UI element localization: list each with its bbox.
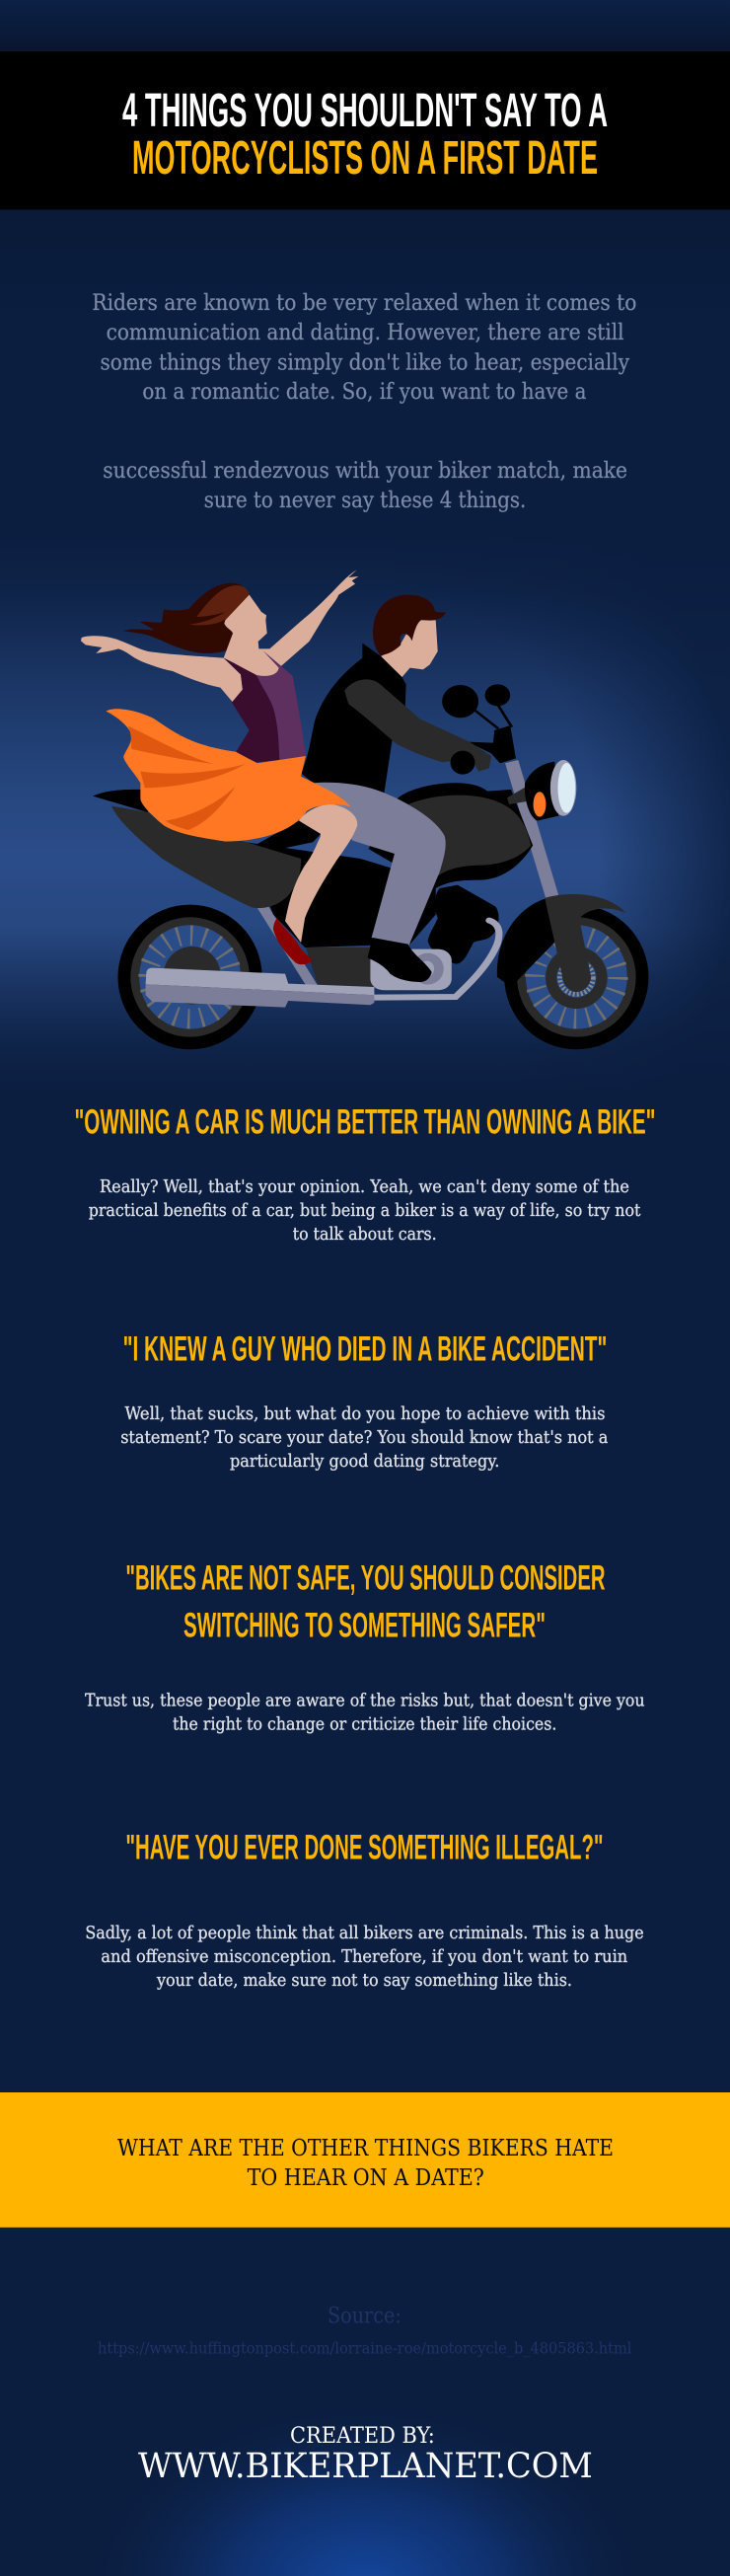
quote 1 text (89, 1176, 641, 1245)
quote 2 text: Well, that sucks, but what do you hope to achieve with this (124, 1403, 606, 1424)
woman passenger (81, 569, 358, 964)
intro text: sure to never say these 4 things. (204, 489, 526, 513)
call to action banner: TO HEAR ON A DATE? (248, 2165, 484, 2191)
quote 4 text: Sadly, a lot of people think that all bikers are criminals. This is a huge (85, 1923, 644, 1943)
source: https://www.huffingtonpost.com/lorraine-roe/motorcycle_b_4805863.html (98, 2338, 631, 2357)
intro text: successful rendezvous with your biker match, make (103, 459, 627, 484)
quote 3 text: the right to change or criticize their life choices. (173, 1713, 556, 1734)
call to action banner (0, 2092, 730, 2228)
quote 4 text: and offensive misconception. Therefore, if you don't want to ruin (101, 1946, 628, 1967)
quote 3 text: Trust us, these people are aware of the risks but, that doesn't give you (85, 1690, 645, 1710)
source (98, 2305, 631, 2357)
intro text: Riders are known to be very relaxed when it comes to (92, 291, 636, 316)
quote 1 text: to talk about cars. (293, 1224, 437, 1245)
quote 1 text: Really? Well, that's your opinion. Yeah, we can't deny some of the (100, 1176, 629, 1197)
quote 1 text: practical benefits of a car, but being a biker is a way of life, so try not (89, 1200, 641, 1221)
illustration: couple riding motorcycle (81, 569, 648, 1049)
credits: CREATED BY: (290, 2423, 435, 2449)
call to action banner: WHAT ARE THE OTHER THINGS BIKERS HATE (117, 2136, 614, 2161)
credits (138, 2423, 593, 2486)
source: Source: (328, 2305, 402, 2329)
quote 2 text: statement? To scare your date? You should know that's not a (120, 1427, 609, 1448)
intro text: communication and dating. However, there are still (107, 321, 624, 345)
man rider (301, 595, 491, 982)
quote 2 text: particularly good dating strategy. (230, 1451, 499, 1472)
intro text (92, 291, 636, 513)
quote 4 text (85, 1923, 644, 1991)
credits: WWW.BIKERPLANET.COM (138, 2447, 593, 2486)
quote 3 heading (125, 1558, 606, 1644)
front wheel (504, 905, 648, 1049)
quote 3 text (85, 1690, 645, 1734)
quote 2 text (120, 1403, 609, 1472)
intro text: some things they simply don't like to hear, especially (101, 350, 630, 375)
intro text: on a romantic date. So, if you want to have a (142, 380, 586, 405)
motorcycle frame and body (93, 760, 626, 998)
exhaust pipe (146, 968, 374, 1008)
quote 4 text: your date, make sure not to say something like this. (156, 1970, 572, 1991)
front end: handlebars, mirrors, headlight (442, 684, 576, 821)
title banner (0, 51, 730, 209)
woman upper body (81, 569, 358, 763)
rear wheel (117, 905, 262, 1049)
